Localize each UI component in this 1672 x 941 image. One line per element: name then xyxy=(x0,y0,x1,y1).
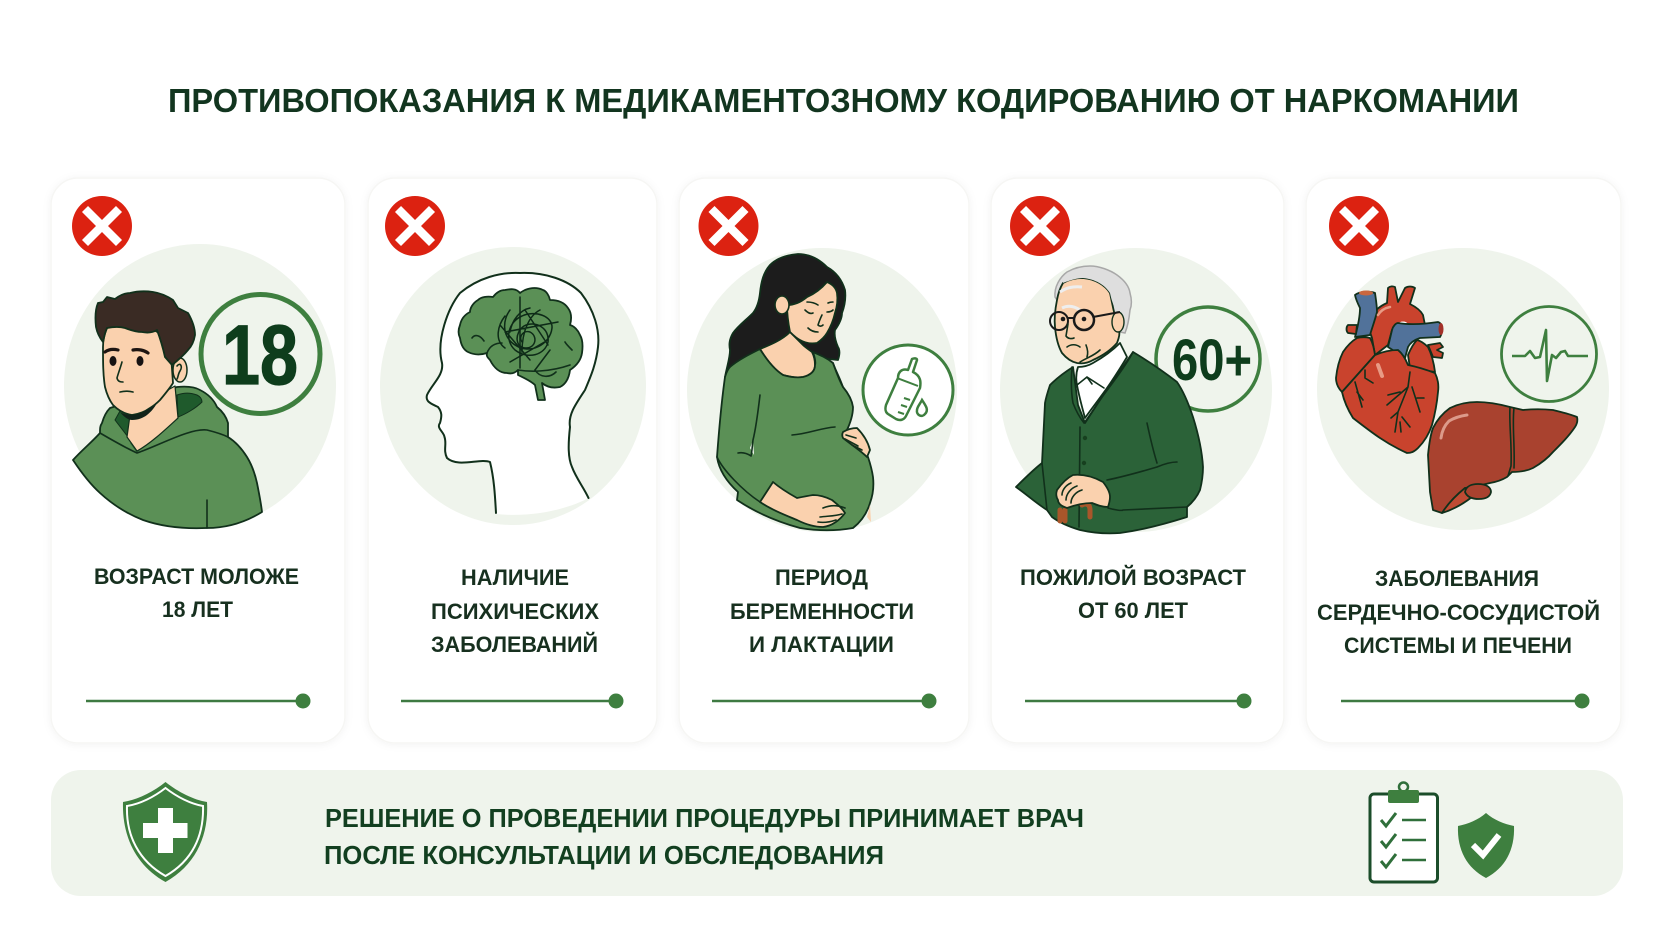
banner text xyxy=(324,803,1084,870)
label: ЗАБОЛЕВАНИЙ xyxy=(431,632,598,657)
illustration: head with tangled brain xyxy=(427,273,598,515)
panel: pregnancy and lactation xyxy=(679,178,969,743)
card background xyxy=(991,178,1284,743)
label: ПСИХИЧЕСКИХ xyxy=(431,599,599,624)
panel: doctor decision banner xyxy=(51,770,1623,896)
illustration: young man in hoodie xyxy=(73,291,262,528)
badge: 60+: 60+ xyxy=(1172,328,1252,393)
banner text: РЕШЕНИЕ О ПРОВЕДЕНИИ ПРОЦЕДУРЫ ПРИНИМАЕТ ВРАЧ xyxy=(325,803,1084,833)
label: И ЛАКТАЦИИ xyxy=(749,632,894,657)
panel: elderly age xyxy=(991,178,1284,743)
label xyxy=(94,564,299,622)
label xyxy=(1317,566,1600,658)
label: ПОЖИЛОЙ ВОЗРАСТ xyxy=(1020,565,1247,590)
icon: red cross xyxy=(385,196,445,256)
icon: shield with cross xyxy=(123,782,207,882)
badge: 18: 18 xyxy=(222,308,298,402)
label: 18 ЛЕТ xyxy=(162,597,234,622)
label: НАЛИЧИЕ xyxy=(461,565,569,590)
badge: pulse xyxy=(1502,306,1596,402)
banner background xyxy=(51,770,1623,896)
label: СЕРДЕЧНО-СОСУДИСТОЙ xyxy=(1317,600,1600,625)
divider with dot xyxy=(1025,694,1252,708)
title: ПРОТИВОПОКАЗАНИЯ К МЕДИКАМЕНТОЗНОМУ КОДИРОВАНИЮ ОТ НАРКОМАНИИ xyxy=(168,82,1519,119)
label: ОТ 60 ЛЕТ xyxy=(1078,598,1189,623)
icon: shield with check xyxy=(1458,813,1514,878)
brain xyxy=(458,288,583,400)
label xyxy=(431,565,599,657)
card background xyxy=(51,178,345,743)
background circle xyxy=(64,244,336,528)
divider with dot xyxy=(401,694,624,708)
illustration: liver xyxy=(1428,402,1577,513)
label: БЕРЕМЕННОСТИ xyxy=(730,599,914,624)
background circle xyxy=(1317,248,1609,530)
label: СИСТЕМЫ И ПЕЧЕНИ xyxy=(1344,633,1572,658)
panel: age under 18 xyxy=(51,178,345,743)
icon: red cross xyxy=(1329,196,1389,256)
icon: red cross xyxy=(72,196,132,256)
divider with dot xyxy=(1341,694,1590,708)
illustration: pregnant woman xyxy=(717,254,873,530)
icon: red cross xyxy=(698,196,758,256)
card background xyxy=(679,178,969,743)
label: ПЕРИОД xyxy=(775,565,868,590)
label xyxy=(1020,565,1247,623)
divider with dot xyxy=(712,694,936,708)
banner text: ПОСЛЕ КОНСУЛЬТАЦИИ И ОБСЛЕДОВАНИЯ xyxy=(324,840,884,870)
illustration: elderly man with cane xyxy=(1016,266,1203,533)
badge: 18 xyxy=(201,294,320,414)
label: ВОЗРАСТ МОЛОЖЕ xyxy=(94,564,299,589)
background circle xyxy=(687,248,957,532)
badge: 60+ xyxy=(1156,307,1260,411)
card background xyxy=(1306,178,1621,743)
panel: mental illness xyxy=(368,178,657,743)
panel: heart and liver disease xyxy=(1306,178,1621,743)
illustration: heart xyxy=(1336,286,1444,453)
icon: clipboard checklist xyxy=(1370,782,1438,882)
label xyxy=(730,565,914,657)
divider with dot xyxy=(86,694,310,708)
background circle xyxy=(380,247,646,525)
background circle xyxy=(1000,248,1272,532)
label: ЗАБОЛЕВАНИЯ xyxy=(1375,566,1539,591)
badge: baby bottle xyxy=(863,345,953,435)
card background xyxy=(368,178,657,743)
icon: red cross xyxy=(1010,196,1070,256)
